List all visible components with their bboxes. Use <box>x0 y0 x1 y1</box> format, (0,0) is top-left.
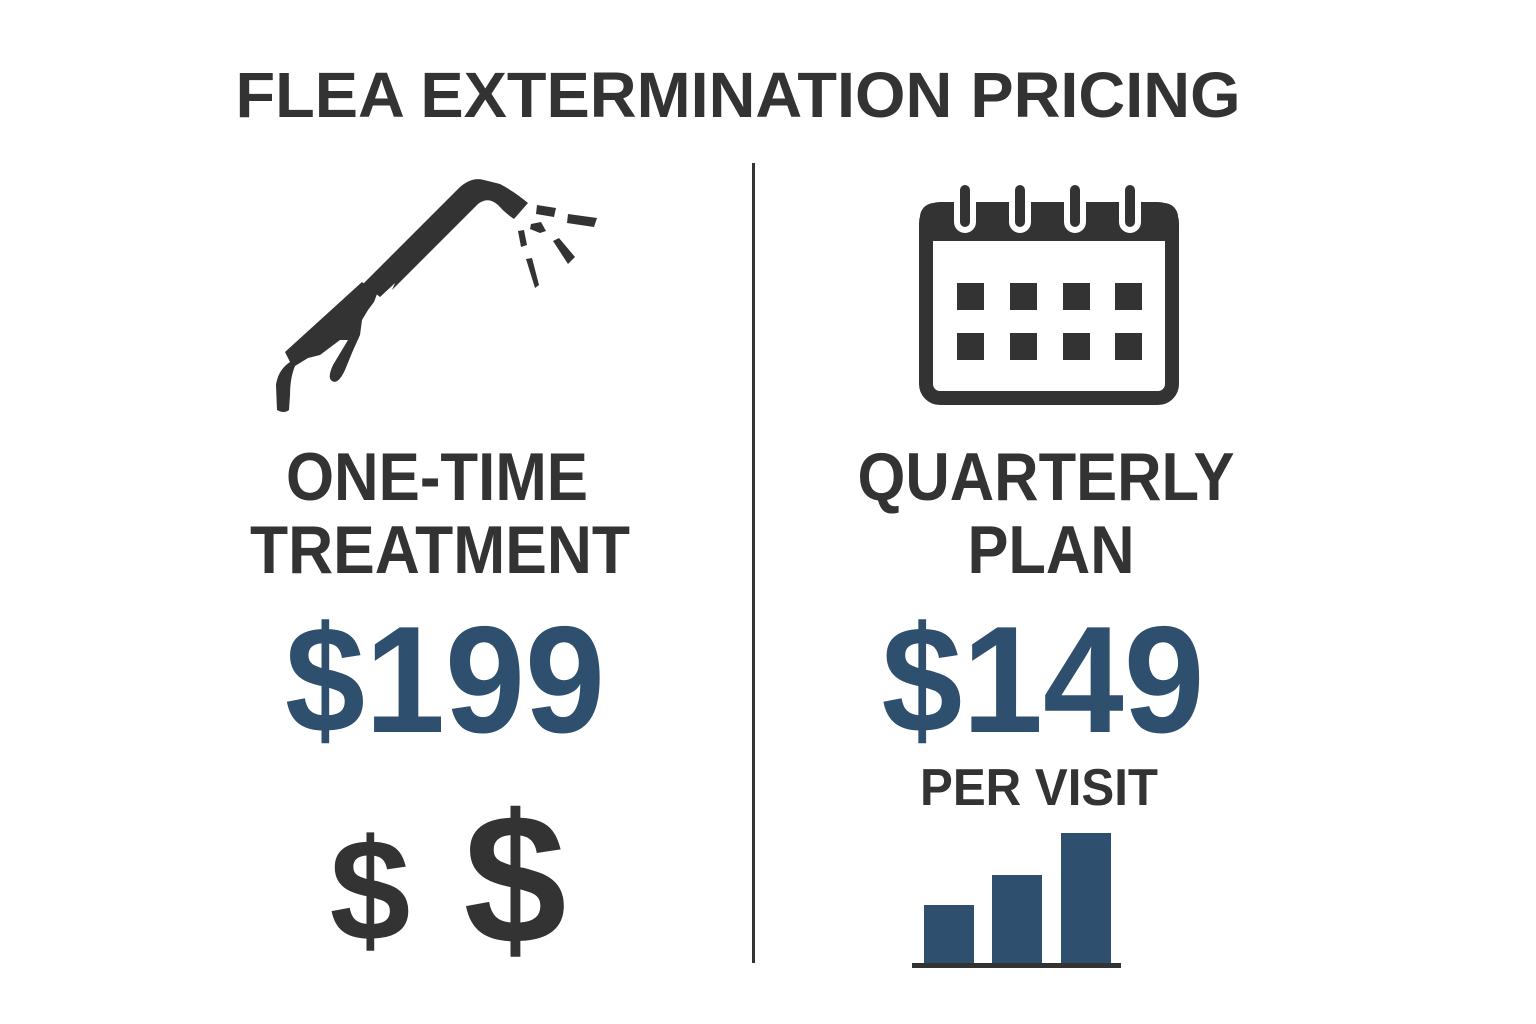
subtext: per visit: PER VISIT <box>920 759 1158 817</box>
divider <box>752 163 755 963</box>
panel: quarterly plan <box>858 182 1234 968</box>
icon: dollar signs: $ <box>464 777 566 983</box>
icon: calendar <box>920 182 1178 398</box>
icon: sprayer <box>276 179 597 412</box>
icon: dollar signs <box>330 777 566 983</box>
icon: dollar signs: $ <box>330 809 410 971</box>
heading: quarterly plan: QUARTERLY <box>858 439 1234 515</box>
panel: one-time treatment <box>250 179 630 983</box>
heading: one-time treatment: ONE-TIME <box>286 439 588 515</box>
price: $199: $199 <box>285 595 605 765</box>
price: $149: $149 <box>882 595 1204 765</box>
bar chart <box>912 833 1121 968</box>
panel: one-time treatment: TREATMENT <box>250 512 630 588</box>
panel: quarterly plan: PLAN <box>968 512 1134 588</box>
title: FLEA EXTERMINATION PRICING <box>236 59 1240 131</box>
